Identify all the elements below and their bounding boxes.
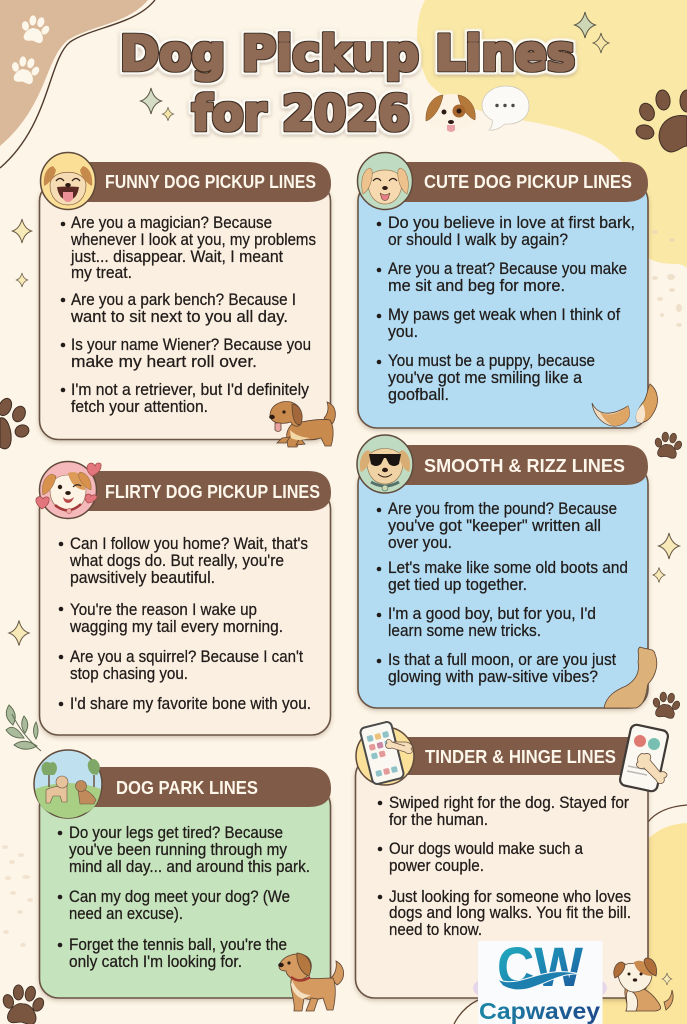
bullets and text: dog park: mind all day... and around this park. xyxy=(69,858,310,876)
icon: dog park avatar xyxy=(34,750,102,818)
decoration: lavender glow behind logo xyxy=(473,968,607,1008)
bullets and text: tinder: Swiped right for the dog. Stayed for xyxy=(389,794,629,812)
icon: happy golden dog avatar xyxy=(358,152,412,210)
bullets and text: tinder: for the human. xyxy=(389,811,488,829)
background curve: outline top left xyxy=(0,0,155,168)
panel: tinder and hinge lines xyxy=(356,721,673,1011)
icon: dog with sunglasses avatar xyxy=(357,435,413,493)
background blob: brown top left xyxy=(0,0,148,146)
panel: smooth and rizz lines xyxy=(357,435,657,708)
sparkle: small top right xyxy=(593,33,609,53)
bullets and text: cute: Are you a treat? Because you make xyxy=(388,260,627,278)
bullets and text: dog park xyxy=(58,824,310,971)
background curve: outline bottom xyxy=(454,1000,478,1024)
panel: flirty dog pickup lines xyxy=(36,462,331,735)
bullets and text: flirty: pawsitively beautiful. xyxy=(70,569,215,587)
bullets and text: cute: or should I walk by again? xyxy=(388,231,568,249)
logo: capwavey: Capwavey xyxy=(479,998,600,1024)
bullets and text: cute: goofball. xyxy=(388,386,449,404)
icon: brown paw top right xyxy=(634,89,687,152)
bullets and text: dog park: only catch I'm looking for. xyxy=(69,953,242,971)
icon: white paw left xyxy=(8,54,43,86)
bullets and text: tinder: Just looking for someone who loves xyxy=(389,888,631,906)
bullets and text: tinder: need to know. xyxy=(389,921,482,939)
header: dog park xyxy=(75,767,331,807)
header: cute: CUTE DOG PICKUP LINES xyxy=(424,171,632,192)
bullets and text: cute: My paws get weak when I think of xyxy=(388,306,620,324)
icon: laughing dog avatar xyxy=(40,152,96,210)
header: flirty: FLIRTY DOG PICKUP LINES xyxy=(105,481,320,502)
dotted texture left xyxy=(2,845,33,947)
header: funny: FUNNY DOG PICKUP LINES xyxy=(105,171,316,192)
bullets and text: dog park: Can my dog meet your dog? (We xyxy=(69,888,290,906)
bullets and text: funny: just... disappear. Wait, I meant xyxy=(70,248,283,266)
bullets and text: cute xyxy=(377,214,635,404)
bullets and text: smooth: learn some new tricks. xyxy=(388,622,541,640)
header: funny xyxy=(70,162,331,202)
icon: brown paw left xyxy=(0,396,31,449)
bullets and text: cute: You must be a puppy, because xyxy=(388,352,595,370)
sparkle: next to puppy xyxy=(662,973,672,985)
bullets and text: funny xyxy=(61,214,316,416)
icon: brown paw right lower xyxy=(650,690,682,720)
panel: dog park lines xyxy=(34,750,344,1011)
bullets and text: funny: Are you a magician? Because xyxy=(71,214,272,232)
bullets and text: flirty: stop chasing you. xyxy=(70,665,188,683)
sparkle: green title left xyxy=(141,88,161,114)
icon: brown paw right upper xyxy=(652,430,684,460)
icon: brown paw bottom left xyxy=(0,983,47,1024)
bullets and text: flirty: Are you a squirrel? Because I can't xyxy=(70,648,303,666)
panel: cute dog pickup lines xyxy=(358,152,657,428)
background curve: outline bottom right xyxy=(648,805,687,822)
icon: winking dog avatar xyxy=(40,462,96,518)
header: flirty xyxy=(70,471,331,511)
header: dog park: DOG PARK LINES xyxy=(116,777,258,798)
bullets and text: smooth: over you. xyxy=(388,534,452,552)
bullets and text: smooth: glowing with paw-sitive vibes? xyxy=(388,668,598,686)
bullets and text: tinder xyxy=(378,794,631,939)
bullets and text: smooth: Are you from the pound? Because xyxy=(388,500,617,518)
icon: hearts xyxy=(36,463,101,509)
header: smooth xyxy=(388,445,648,485)
bullets and text: cute: Do you believe in love at first bark, xyxy=(388,214,635,232)
bullets and text: funny: make my heart roll over. xyxy=(71,353,257,371)
bullets and text: flirty: wagging my tail every morning. xyxy=(69,618,283,636)
bullets and text: smooth: you've got "keeper" written all xyxy=(388,517,601,535)
bullets and text: flirty xyxy=(59,535,311,713)
sparkle: left small xyxy=(16,273,28,287)
sparkle: left upper xyxy=(12,219,32,243)
bullets and text: funny: want to sit next to you all day. xyxy=(70,308,288,326)
bullets and text: smooth xyxy=(377,500,628,686)
bullets and text: cute: you. xyxy=(388,323,418,341)
logo: capwavey: CW xyxy=(497,935,583,998)
bullets and text: funny: I'm not a retriever, but I'd definitely xyxy=(71,381,310,399)
bullets and text: dog park: Forget the tennis ball, you're the xyxy=(69,936,287,954)
dotted texture right xyxy=(652,230,682,327)
bullets and text: smooth: get tied up together. xyxy=(388,576,527,594)
icon: speech bubble xyxy=(482,86,529,130)
bullets and text: cute: you've got me smiling like a xyxy=(388,369,583,387)
bullets and text: flirty: what dogs do. But really, you're xyxy=(69,552,284,570)
header: tinder xyxy=(385,737,630,775)
title: Dog Pickup Lines xyxy=(120,26,575,82)
title xyxy=(120,26,575,142)
bullets and text: dog park: you've been running through my xyxy=(69,841,288,859)
logo swoosh xyxy=(497,972,580,990)
background blob: yellow top right xyxy=(417,0,687,268)
icon: leaf sprig xyxy=(6,705,41,751)
sparkle: left middle xyxy=(9,620,29,646)
icon: phone with bone xyxy=(619,724,669,792)
bullets and text: tinder: Our dogs would make such a xyxy=(389,840,584,858)
panel: funny dog pickup lines xyxy=(40,152,335,447)
icon: dog tails xyxy=(592,384,657,426)
logo: capwavey xyxy=(478,935,602,1024)
icon: dog face emoji xyxy=(426,94,476,132)
bullets and text: funny: Is your name Wiener? Because you xyxy=(71,336,311,354)
bullets and text: flirty: I'd share my favorite bone with you. xyxy=(70,695,311,713)
bullets and text: tinder: power couple. xyxy=(389,857,484,875)
bullets and text: funny: whenever I look at you, my problems xyxy=(70,231,316,249)
title: for 2026 xyxy=(192,86,410,142)
bullets and text: funny: my treat. xyxy=(71,264,132,282)
bullets and text: smooth: I'm a good boy, but for you, I'd xyxy=(388,605,596,623)
header: smooth: SMOOTH & RIZZ LINES xyxy=(424,455,625,476)
bullets and text: smooth: Is that a full moon, or are you just xyxy=(388,651,616,669)
sparkle: small title left xyxy=(163,107,173,121)
bullets and text: dog park: need an excuse). xyxy=(69,905,183,923)
icon: standing dog with red collar xyxy=(278,953,344,1011)
bullets and text: cute: me sit and beg for more. xyxy=(388,277,565,295)
sparkle: right middle xyxy=(659,533,679,559)
bullets and text: funny: fetch your attention. xyxy=(71,398,208,416)
icon: dog leg and paw xyxy=(604,647,657,708)
sparkle: green top right xyxy=(575,12,595,38)
icon: dachshund puppy xyxy=(269,402,335,447)
icon: phone with apps avatar xyxy=(356,721,414,785)
bullets and text: smooth: Let's make like some old boots and xyxy=(388,559,628,577)
header: cute xyxy=(388,162,648,202)
bullets and text: flirty: Can I follow you home? Wait, that's xyxy=(70,535,308,553)
icon: sitting puppy xyxy=(614,958,673,1011)
bullets and text: funny: Are you a park bench? Because I xyxy=(71,291,296,309)
background blob: yellow bottom right xyxy=(600,823,687,1024)
header: tinder: TINDER & HINGE LINES xyxy=(425,746,616,767)
icon: white paw top left xyxy=(18,13,53,45)
bullets and text: dog park: Do your legs get tired? Because xyxy=(69,824,283,842)
sparkle: right small xyxy=(653,568,665,582)
bullets and text: flirty: You're the reason I wake up xyxy=(70,601,257,619)
bullets and text: tinder: dogs and long walks. You fit the bill. xyxy=(389,904,631,922)
